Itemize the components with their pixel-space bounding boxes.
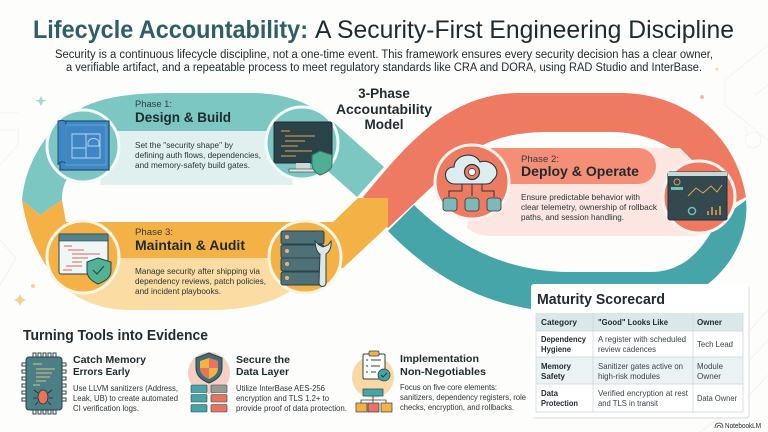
title: A Security-First Engineering Discipline xyxy=(315,16,734,44)
table: scorecard: Memory xyxy=(541,361,571,371)
subtitle text block: a verifiable artifact, and a repeatable process to meet regulatory standards like CRA and DORA, using RAD Studio and InterBase. xyxy=(66,62,702,74)
table: scorecard: Data xyxy=(541,388,558,398)
panel: Phase 3 Maintain & Audit xyxy=(47,221,341,310)
evidence item: implementation non-negotiables: sanitizers, dependency registers, role xyxy=(400,392,526,402)
table: scorecard: A register with scheduled xyxy=(598,334,686,344)
panel: Phase 3 Maintain & Audit: Manage security after shipping via xyxy=(135,266,260,276)
icon: shield with server blocks xyxy=(188,352,230,412)
watermark: NotebookLM xyxy=(715,421,761,430)
evidence item: secure the data layer: encryption and TLS 1.2+ to xyxy=(236,393,329,403)
table: scorecard xyxy=(536,313,743,412)
evidence item: catch memory errors: Leak, UB) to create automated xyxy=(73,393,178,403)
panel: Phase 2 Deploy & Operate: Ensure predictable behavior with xyxy=(521,192,640,202)
table: scorecard: Module xyxy=(697,361,723,371)
table: scorecard: "Good" Looks Like xyxy=(598,317,668,327)
evidence item: implementation non-negotiables: Implementation xyxy=(400,353,479,365)
panel: Phase 3 Maintain & Audit: Phase 3: xyxy=(135,227,173,238)
panel: Phase 2 Deploy & Operate: paths, and session handling. xyxy=(521,212,624,222)
icon: clipboard with hierarchy xyxy=(352,351,394,412)
table: scorecard: Sanitizer gates active on xyxy=(598,361,683,371)
icon: analytics dashboard xyxy=(663,161,735,233)
panel: Maturity Scorecard xyxy=(531,284,750,419)
table: scorecard: Protection xyxy=(541,398,578,408)
watermark: NotebookLM: NotebookLM xyxy=(725,421,761,430)
arrow band: teal design loop xyxy=(22,93,384,215)
panel: Phase 1 Design & Build: Set the "security shape" by xyxy=(135,140,234,150)
panel: Phase 2 Deploy & Operate: Deploy & Operate xyxy=(521,163,639,179)
evidence item: implementation non-negotiables xyxy=(352,351,526,412)
arrow band: coral deploy loop xyxy=(363,93,746,228)
evidence item: catch memory errors: Errors Early xyxy=(73,366,130,378)
evidence item: secure the data layer: Secure the xyxy=(236,354,290,366)
evidence item: catch memory errors xyxy=(22,353,178,414)
table: scorecard: Safety xyxy=(541,371,565,381)
evidence item: secure the data layer: provide proof of data protection. xyxy=(236,403,347,413)
panel: Phase 3 Maintain & Audit: Maintain & Audit xyxy=(135,237,245,253)
icon: blueprint xyxy=(47,110,119,182)
table: scorecard: Owner xyxy=(697,317,723,327)
table: scorecard: Data Owner xyxy=(697,393,737,403)
panel: Phase 3 Maintain & Audit: and incident playbooks. xyxy=(135,286,221,296)
table: scorecard: Tech Lead xyxy=(697,339,733,349)
evidence item: implementation non-negotiables: Focus on five core elements: xyxy=(400,382,497,392)
icon: cloud with databases xyxy=(435,145,509,219)
evidence item: secure the data layer: Data Layer xyxy=(236,366,289,378)
evidence item: secure the data layer xyxy=(188,352,347,413)
panel: Phase 1 Design & Build: and memory-safety build gates. xyxy=(135,160,250,170)
panel: Phase 1 Design & Build: defining auth flows, dependencies, xyxy=(135,150,261,160)
evidence item: implementation non-negotiables: Non-Negotiables xyxy=(400,366,486,378)
panel: Phase 2 Deploy & Operate: clear telemetry, ownership of rollback xyxy=(521,202,658,212)
panel: Maturity Scorecard: Maturity Scorecard xyxy=(537,292,665,308)
subtitle text block xyxy=(55,49,713,74)
icon: server rack with wrench xyxy=(269,221,341,293)
heading: 3-Phase Accountability Model: Model xyxy=(364,117,404,132)
panel: Phase 2 Deploy & Operate: Phase 2: xyxy=(521,154,559,165)
panel: Phase 2 Deploy & Operate xyxy=(435,145,735,236)
table: scorecard: Dependency xyxy=(541,334,586,344)
evidence item: implementation non-negotiables: checks, encryption, and rollbacks. xyxy=(400,402,514,412)
panel: Phase 3 Maintain & Audit: dependency reviews, patch policies, xyxy=(135,276,266,286)
table: scorecard: Owner xyxy=(697,371,721,381)
heading: Turning Tools into Evidence: Turning Tools into Evidence xyxy=(23,328,208,344)
arrow band: teal return loop xyxy=(388,200,746,312)
panel: Phase 1 Design & Build: Phase 1: xyxy=(135,99,172,110)
table: scorecard: Verified encryption at rest xyxy=(598,388,689,398)
title xyxy=(33,16,734,44)
evidence item: secure the data layer: Utilize InterBase AES-256 xyxy=(236,383,325,393)
heading: 3-Phase Accountability Model xyxy=(336,86,433,132)
heading: 3-Phase Accountability Model: Accountability xyxy=(336,102,433,117)
panel: Phase 1 Design & Build: Design & Build xyxy=(135,109,231,125)
evidence item: catch memory errors: Catch Memory xyxy=(73,354,146,366)
table: scorecard: high-risk modules xyxy=(598,371,660,381)
evidence item: catch memory errors: Use LLVM sanitizers (Address, xyxy=(73,383,178,393)
subtitle text block: Security is a continuous lifecycle discipline, not a one-time event. This framework ensures every security decision has a clear owner, xyxy=(55,49,713,61)
table: scorecard: Category xyxy=(541,317,577,327)
evidence item: catch memory errors: CI verification logs. xyxy=(73,403,139,413)
icon: monitor with shield xyxy=(266,107,338,179)
title: Lifecycle Accountability: xyxy=(33,16,308,44)
arrow band: orange audit loop xyxy=(22,198,388,290)
icon: code window with shield xyxy=(47,221,119,293)
table: scorecard: Hygiene xyxy=(541,344,571,354)
icon: chip with bug xyxy=(22,353,66,414)
table: scorecard: review cadences xyxy=(598,344,656,354)
heading: 3-Phase Accountability Model: 3-Phase xyxy=(358,86,410,101)
table: scorecard: and TLS in transit xyxy=(598,398,659,408)
panel: Phase 1 Design & Build xyxy=(47,99,338,185)
